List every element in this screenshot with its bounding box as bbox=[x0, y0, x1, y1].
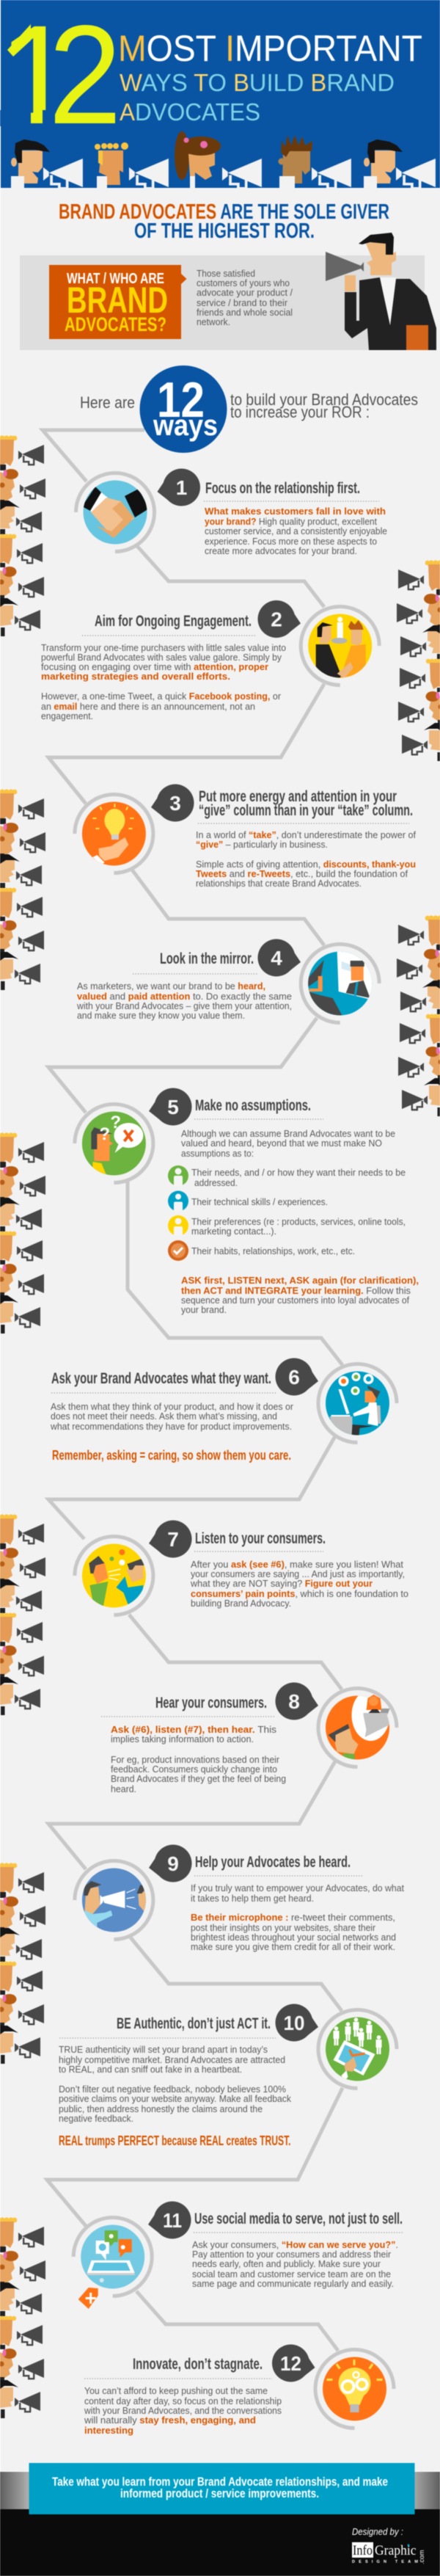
callout: remember: Remember, asking = caring, so show them you care. bbox=[52, 1448, 291, 1463]
number bubble 6: 6 bbox=[288, 1366, 300, 1389]
credit: designed by bbox=[352, 2526, 425, 2564]
definition text: advocate your product / bbox=[197, 287, 293, 298]
list item: needs: addressed. bbox=[194, 1177, 238, 1188]
credit: designed by: Designed by : bbox=[352, 2526, 403, 2537]
body text closing bbox=[181, 1275, 419, 1315]
number bubble 9: 9 bbox=[167, 1852, 179, 1875]
body text: experience. Focus more on these aspects to bbox=[205, 536, 377, 547]
body text bbox=[192, 2239, 398, 2289]
icon: clock with check bbox=[168, 1240, 188, 1261]
credit: designed by: DESIGN TEAM bbox=[352, 2560, 418, 2564]
icon: businessman with megaphone bbox=[326, 233, 436, 350]
orange plus tag bbox=[78, 2288, 98, 2309]
body text: You can’t afford to keep pushing out the same bbox=[84, 2385, 268, 2396]
icon: handshake bbox=[76, 473, 154, 552]
number bubble 8 bbox=[276, 1682, 318, 1720]
icon: tablet with social bubbles bbox=[73, 2218, 152, 2309]
orange callout box bbox=[49, 265, 186, 339]
headline: BRAND ADVOCATES ARE THE SOLE GIVER bbox=[59, 200, 389, 224]
list item: preferences: Their preferences (re : products, services, online tools, bbox=[191, 1216, 406, 1227]
body text closing: your brand. bbox=[181, 1304, 227, 1315]
body text: Ask your consumers, “How can we serve you?”. bbox=[192, 2239, 398, 2250]
list item: skills: Their technical skills / experiences. bbox=[191, 1196, 328, 1207]
body text: positive claims on your website anyway. Make all feedback bbox=[59, 2093, 291, 2104]
title line: ways to build brand: WAYS TO BUILD BRAND bbox=[120, 70, 395, 97]
icon: light bulb in hand bbox=[75, 794, 153, 873]
body text: brightest ideas throughout your social networks and bbox=[191, 1932, 396, 1943]
definition text: service / brand to their bbox=[197, 297, 288, 308]
number bubble 4 bbox=[258, 939, 301, 976]
title line: most important: MOST IMPORTANT bbox=[118, 28, 422, 69]
definition text: Those satisfied bbox=[197, 268, 255, 279]
body text: implies taking information to action. bbox=[111, 1733, 254, 1744]
body text: with your Brand Advocates, and the conversations bbox=[84, 2405, 282, 2416]
body text: and make sure they know you value them. bbox=[77, 1010, 245, 1021]
credit: designed by: Info bbox=[353, 2543, 373, 2558]
panel: step 11 bbox=[73, 2202, 404, 2309]
number bubble 3 bbox=[151, 784, 194, 822]
body text: Pay attention to your consumers and address their bbox=[192, 2249, 392, 2260]
body text: After you ask (see #6), make sure you listen! What bbox=[191, 1559, 403, 1570]
body text bbox=[190, 1559, 408, 1609]
body text: post their insights on your websites, share their bbox=[191, 1922, 376, 1933]
footer bbox=[0, 2463, 440, 2576]
body text closing: sequence and turn your customers into loyal advocates of bbox=[181, 1295, 409, 1306]
icon: person blue with bulb bbox=[168, 1190, 188, 1211]
body text: negative feedback. bbox=[59, 2113, 133, 2124]
body text: Be their microphone : re-tweet their comments, bbox=[191, 1912, 395, 1923]
body text: If you truly want to empower your Advocates, do what bbox=[191, 1882, 404, 1893]
body text: heard. bbox=[111, 1783, 136, 1794]
heading: BE Authentic, don’t just ACT it. bbox=[117, 2015, 271, 2032]
heading: Make no assumptions. bbox=[195, 1097, 311, 1114]
body text: your consumers are saying ... And just as importantly, bbox=[191, 1568, 405, 1579]
operator with headset bbox=[364, 1695, 390, 1715]
body text: same page and communicate regularly and easily. bbox=[192, 2278, 394, 2289]
body text closing: then ACT and INTEGRATE your learning. Follow this bbox=[181, 1285, 411, 1296]
body text: social team and customer service team are on the bbox=[192, 2268, 391, 2280]
body text: does not meet their needs. Ask them what’s missing, and bbox=[51, 1411, 277, 1422]
list item: preferences bbox=[191, 1216, 406, 1237]
body text: Ask them what they think of your product, and how it does or bbox=[51, 1401, 294, 1412]
headline bbox=[59, 200, 389, 243]
panel: step 4 bbox=[76, 939, 379, 1023]
heading: Hear your consumers. bbox=[155, 1695, 267, 1711]
list item: habits: Their habits, relationships, work, etc., etc. bbox=[191, 1245, 355, 1256]
icon: man with megaphone bbox=[75, 1861, 153, 1939]
number bubble 1: 1 bbox=[176, 476, 187, 499]
definition text: customers of yours who bbox=[197, 277, 290, 288]
intro line with 12 ways badge: Here are bbox=[80, 393, 135, 412]
heading: Help your Advocates be heard. bbox=[195, 1854, 351, 1871]
advocate figure 4 with megaphone bbox=[279, 135, 351, 190]
title number 12: 2 bbox=[48, 0, 122, 153]
body text: interesting bbox=[84, 2425, 133, 2436]
body text: to REAL, and can sniff out fake in a heartbeat. bbox=[59, 2064, 242, 2075]
body text: Tweets and re-Tweets, etc., build the foundation of bbox=[196, 868, 408, 879]
callout: real trumps perfect: REAL trumps PERFECT because REAL creates TRUST. bbox=[59, 2133, 290, 2148]
number bubble 12 bbox=[272, 2344, 315, 2382]
badge: 12 ways bbox=[139, 365, 227, 453]
number bubble 11 bbox=[148, 2202, 191, 2238]
heading: Ask your Brand Advocates what they want. bbox=[51, 1370, 271, 1387]
icon: bulb with gears bbox=[315, 2350, 394, 2428]
body text: will naturally stay fresh, engaging, and bbox=[84, 2415, 256, 2426]
body text: make sure you give them credit for all of their work. bbox=[191, 1941, 395, 1952]
number bubble 10: 10 bbox=[283, 2012, 305, 2034]
body text bbox=[76, 980, 292, 1021]
body text: public, then address honestly the claims around the bbox=[59, 2103, 263, 2114]
badge: 12 ways: 12 bbox=[157, 372, 205, 428]
credit: designed by: .com bbox=[418, 2550, 425, 2564]
header banner bbox=[0, 0, 440, 190]
number bubble 3: 3 bbox=[169, 792, 181, 815]
body text: create more advocates for your brand. bbox=[205, 545, 357, 556]
body text: Transform your one-time purchasers with little sales value into bbox=[41, 642, 286, 653]
number bubble 7 bbox=[149, 1521, 192, 1557]
number bubble 7: 7 bbox=[167, 1528, 179, 1551]
heading: Look in the mirror. bbox=[160, 950, 254, 967]
advocate figure 1 with megaphone bbox=[11, 139, 83, 190]
panel: step 5 bbox=[75, 1088, 419, 1315]
body text: an email here and there is an announcement, not an bbox=[41, 701, 255, 712]
panel: step 10 bbox=[59, 2004, 397, 2148]
number bubble 1 bbox=[157, 468, 200, 506]
number bubble 12: 12 bbox=[280, 2352, 301, 2375]
orange callout box: ADVOCATES? bbox=[65, 313, 166, 335]
body text: marketing strategies and overall efforts. bbox=[41, 671, 230, 682]
heading bbox=[199, 788, 413, 819]
body text: what recommendations they have for product improvements. bbox=[50, 1421, 292, 1432]
number bubble 6 bbox=[276, 1358, 318, 1396]
number bubble 2 bbox=[258, 600, 301, 638]
body text: engagement. bbox=[41, 710, 93, 721]
body text intro bbox=[181, 1128, 395, 1159]
number bubble 5 bbox=[149, 1088, 192, 1126]
panel: step 1 bbox=[76, 468, 387, 556]
definition text: friends and whole social bbox=[197, 307, 293, 318]
body text: what they are NOT saying? Figure out your bbox=[190, 1578, 373, 1589]
icon: thinking person with X bubble: ? bbox=[110, 1113, 121, 1132]
body text bbox=[59, 2044, 291, 2124]
connector path linking the twelve steps bbox=[43, 430, 342, 2351]
number bubble 5: 5 bbox=[167, 1096, 179, 1118]
body text bbox=[84, 2385, 282, 2436]
body text: content day after day, so focus on the relationship bbox=[84, 2395, 282, 2406]
heading: Listen to your consumers. bbox=[195, 1530, 326, 1547]
headline: OF THE HIGHEST ROR. bbox=[134, 219, 315, 243]
body text: Ask (#6), listen (#7), then hear. This bbox=[111, 1724, 277, 1735]
icon: man in mirror bbox=[301, 944, 379, 1023]
number bubble 10 bbox=[276, 2004, 318, 2042]
definition text: network. bbox=[197, 316, 230, 327]
heading: Aim for Ongoing Engagement. bbox=[95, 613, 252, 630]
takeaway banner: informed product / service improvements. bbox=[120, 2486, 319, 2500]
heading: Innovate, don’t stagnate. bbox=[133, 2356, 263, 2373]
body text: TRUE authenticity will set your brand apart in today’s bbox=[59, 2044, 268, 2055]
left strip of advocates with megaphones bbox=[0, 435, 45, 2418]
title number 12 bbox=[0, 0, 122, 153]
panel: what are brand advocates bbox=[20, 233, 436, 350]
icon: man at computer bbox=[318, 1364, 397, 1443]
body text bbox=[205, 506, 387, 556]
advocate figure 2 with megaphone bbox=[95, 142, 169, 190]
body text: your brand? High quality product, excellent bbox=[205, 516, 377, 527]
body text: For eg, product innovations based on their bbox=[111, 1754, 280, 1765]
title line: advocates: ADVOCATES bbox=[120, 99, 260, 126]
icon: two people talking bbox=[75, 1537, 153, 1615]
list item: needs: Their needs, and / or how they want their needs to be bbox=[191, 1167, 406, 1178]
orange callout box: WHAT / WHO ARE bbox=[67, 271, 164, 287]
body text: However, a one-time Tweet, a quick Facebook posting, or bbox=[41, 691, 282, 702]
body text: Don’t filter out negative feedback, nobody believes 100% bbox=[59, 2084, 286, 2095]
icon: crowd and tablet bbox=[318, 2009, 397, 2089]
body text: What makes customers fall in love with bbox=[205, 506, 386, 517]
heading: Focus on the relationship first. bbox=[205, 480, 360, 497]
icon: people with trophy bbox=[301, 606, 379, 685]
body text: As marketers, we want our brand to be heard, bbox=[77, 980, 265, 992]
body text: customer service, and a consistently enjoyable bbox=[205, 525, 387, 536]
body text: “give” – particularly in business. bbox=[196, 839, 328, 850]
body text bbox=[50, 1401, 294, 1432]
body text: consumers’ pain points, which is one foundation to bbox=[191, 1588, 408, 1599]
icon: thinking person with X bubble bbox=[75, 1104, 153, 1183]
body text: powerful Brand Advocates with sales value galore. Simply by bbox=[41, 652, 282, 663]
intro line with 12 ways badge bbox=[80, 365, 418, 453]
icon: person green bbox=[168, 1165, 188, 1186]
body text: relationships that create Brand Advocates. bbox=[196, 878, 362, 889]
body text intro: Although we can assume Brand Advocates want to be bbox=[181, 1128, 395, 1139]
body text bbox=[191, 1882, 404, 1952]
panel: step 7 bbox=[75, 1521, 408, 1615]
number bubble 9 bbox=[149, 1845, 192, 1882]
number bubble 11: 11 bbox=[163, 2209, 182, 2232]
orange callout box: BRAND bbox=[67, 280, 168, 321]
body text bbox=[196, 829, 416, 889]
body text: highly competitive market. Brand Advocates are attracted bbox=[59, 2054, 285, 2065]
advocate figure 5 with megaphone bbox=[364, 139, 436, 190]
intro line with 12 ways badge: to build your Brand Advocates bbox=[230, 390, 418, 409]
advocate figure 3 with megaphone bbox=[175, 131, 262, 190]
panel: step 3 bbox=[75, 784, 416, 889]
icon: person yellow with gear bbox=[168, 1215, 188, 1236]
panel: step 12 bbox=[84, 2344, 394, 2436]
panel: step 2 bbox=[41, 600, 379, 721]
number bubble 4: 4 bbox=[271, 947, 282, 969]
body text: needs early, often and publicly. Make sure your bbox=[192, 2258, 381, 2269]
definition text bbox=[197, 268, 293, 327]
number bubble 2: 2 bbox=[271, 608, 282, 631]
body text: feedback. Consumers quickly change into bbox=[111, 1764, 277, 1775]
body text: focusing on engaging over time with attention, proper bbox=[41, 661, 268, 672]
body text bbox=[111, 1724, 286, 1794]
icon: thinking person with X bubble: ? bbox=[99, 1124, 110, 1144]
icon: customer and operator bbox=[318, 1688, 397, 1767]
takeaway banner bbox=[29, 2463, 415, 2514]
intro line with 12 ways badge: to increase your ROR : bbox=[230, 403, 370, 421]
panel: step 6 bbox=[50, 1358, 397, 1463]
panel: step 8 bbox=[101, 1682, 397, 1794]
body text: with your Brand Advocates – give them your attention, bbox=[76, 1000, 292, 1011]
right strip of advocates with megaphones bbox=[397, 560, 440, 1116]
list item: needs bbox=[191, 1167, 406, 1188]
body text: it takes to help them get heard. bbox=[191, 1893, 314, 1904]
body text: In a world of “take”, don’t underestimate the power of bbox=[196, 829, 416, 840]
body text closing: ASK first, LISTEN next, ASK again (for clarification), bbox=[181, 1275, 419, 1286]
body text: Brand Advocates if they get the feel of being bbox=[111, 1773, 286, 1784]
body text: Simple acts of giving attention, discounts, thank-you bbox=[196, 859, 416, 870]
body text intro: valued and heard, beyond that we must make NO bbox=[181, 1138, 382, 1149]
credit: designed by: Graphic bbox=[375, 2543, 417, 2558]
body text: building Brand Advocacy. bbox=[191, 1598, 291, 1609]
body text: valued and paid attention to. Do exactly the same bbox=[77, 991, 292, 1002]
number bubble 8: 8 bbox=[288, 1690, 300, 1713]
body text bbox=[41, 642, 286, 721]
badge: 12 ways: ways bbox=[153, 410, 218, 442]
list item: preferences: marketing contact...). bbox=[191, 1226, 276, 1237]
panel: step 9 bbox=[75, 1845, 404, 1952]
body text intro: assumptions as to: bbox=[181, 1148, 254, 1159]
